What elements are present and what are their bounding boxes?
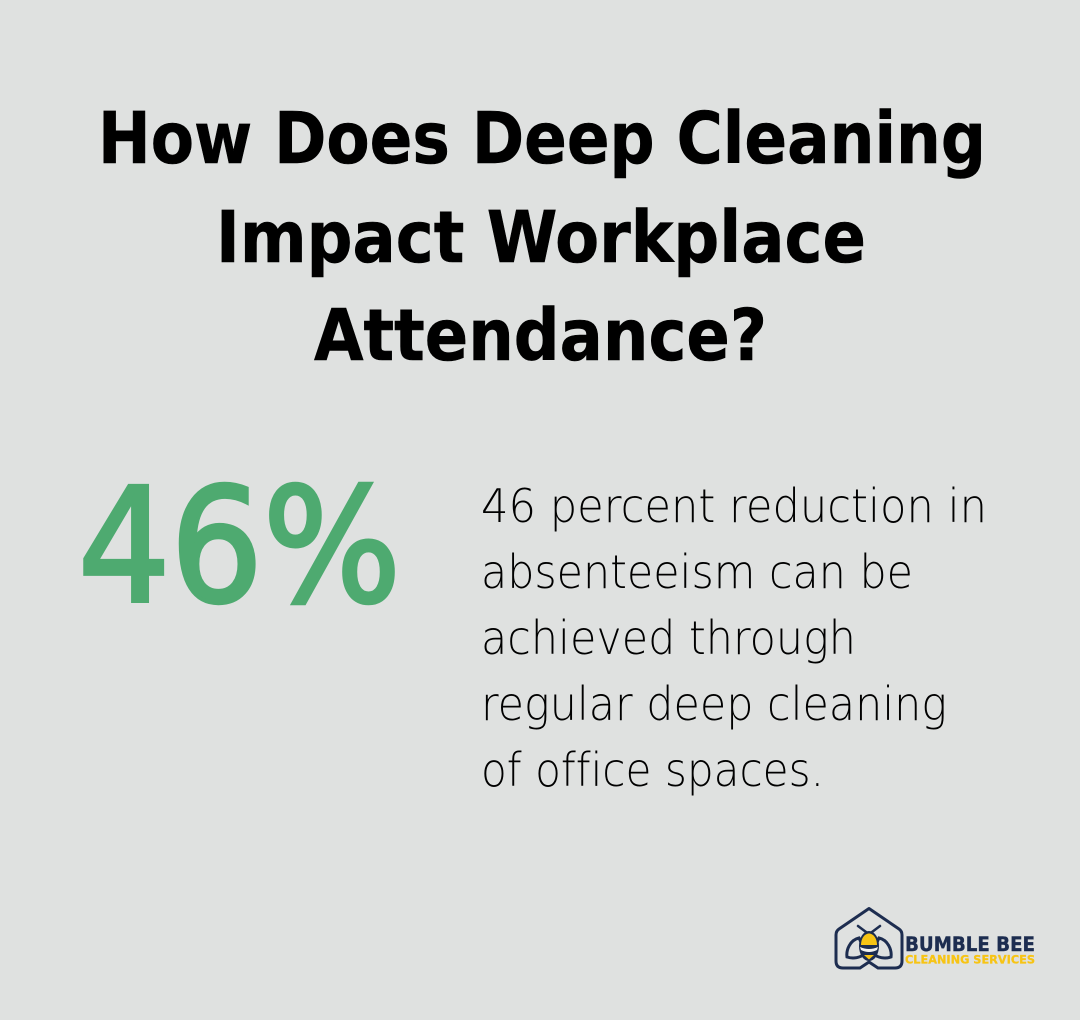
- icon: house outline: [836, 908, 902, 968]
- logo: Bumble Bee Cleaning Services: [836, 908, 1035, 968]
- statistic description: 46 percent reduction in: [481, 479, 987, 533]
- title: [98, 97, 986, 377]
- statistic description: [481, 479, 987, 797]
- statistic description: of office spaces.: [481, 743, 824, 797]
- title: Attendance?: [314, 294, 767, 377]
- logo tagline: CLEANING SERVICES: [905, 952, 1035, 966]
- title: Impact Workplace: [216, 196, 866, 279]
- icon: bee: [847, 926, 891, 961]
- logo wordmark: BUMBLE BEE: [905, 933, 1035, 956]
- statistic description: absenteeism can be: [481, 545, 913, 599]
- title: How Does Deep Cleaning: [98, 97, 986, 180]
- statistic description: regular deep cleaning: [481, 677, 947, 731]
- big statistic: 46%: 46%: [78, 455, 401, 639]
- statistic description: achieved through: [481, 611, 856, 665]
